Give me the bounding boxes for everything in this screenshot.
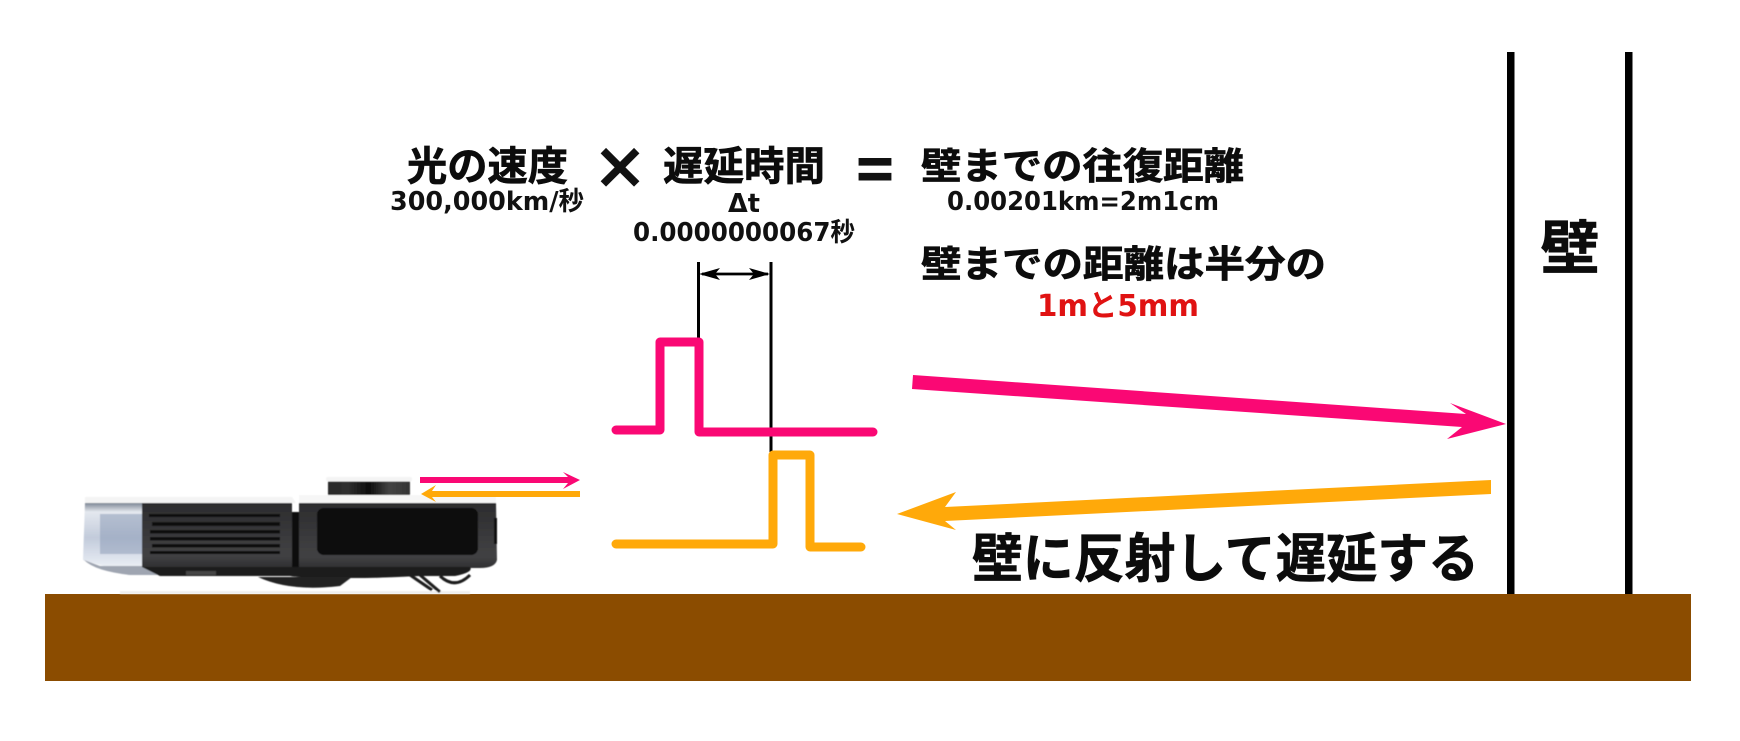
wall label: 壁 — [1540, 216, 1600, 282]
pink signal pulse — [616, 342, 873, 432]
result in red: 1mと5mm — [1037, 289, 1199, 324]
equals sign: = — [853, 129, 897, 206]
formula: round trip distance: 壁までの往復距離 — [921, 146, 1244, 187]
delta t: Δt — [728, 189, 760, 219]
formula: delay time — [633, 145, 855, 248]
formula: speed of light — [390, 145, 584, 217]
speed value: 300,000km/秒 — [390, 187, 584, 217]
formula: delay time: 遅延時間 — [663, 145, 825, 189]
reflection caption: 壁に反射して遅延する — [972, 530, 1479, 589]
formula: round trip distance — [921, 146, 1244, 217]
pink arrow to wall — [912, 375, 1506, 439]
vent grille — [149, 514, 280, 554]
small return arrow — [421, 485, 580, 502]
wall — [1507, 52, 1632, 594]
orange signal pulse — [616, 455, 861, 547]
half distance text: 壁までの距離は半分の — [921, 244, 1326, 285]
half distance text — [921, 244, 1326, 324]
round trip value: 0.00201km=2m1cm — [947, 187, 1219, 217]
lidar turret — [326, 477, 412, 495]
small outgoing arrow — [420, 472, 580, 489]
delay value: 0.0000000067秒 — [633, 218, 855, 248]
robot vacuum — [83, 477, 497, 594]
delay bracket — [698, 262, 771, 452]
formula: speed of light: 光の速度 — [407, 145, 568, 189]
orange arrow from wall — [897, 480, 1491, 530]
ground — [45, 594, 1691, 681]
multiply sign: × — [592, 127, 648, 204]
